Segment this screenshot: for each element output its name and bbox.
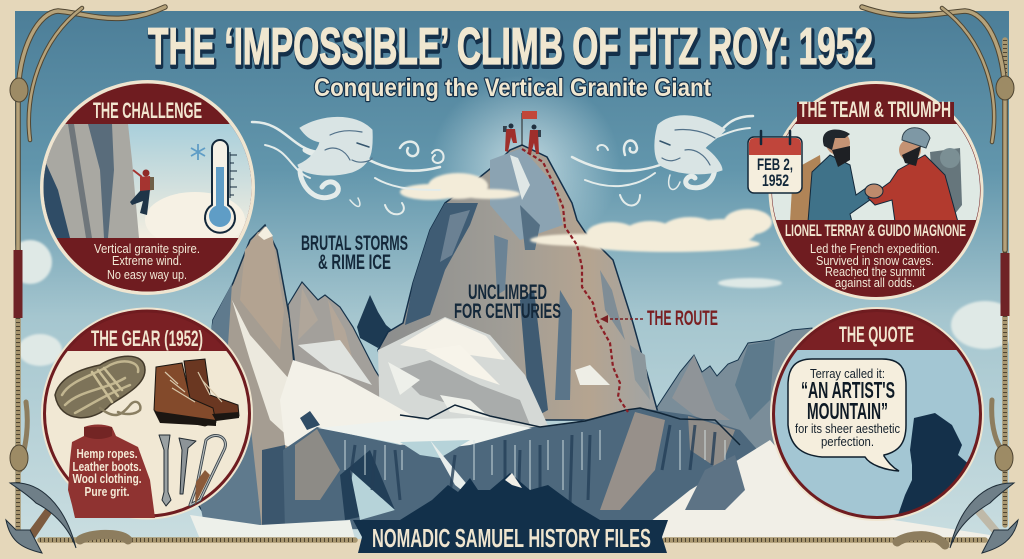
text: team details	[810, 242, 940, 290]
icon: red wool sweater with text: Hemp ropes.	[76, 447, 138, 461]
speech bubble with quote	[788, 359, 906, 471]
panel: the gear	[41, 308, 253, 520]
cloud over main peak right	[530, 209, 772, 252]
icon: snowflake	[191, 144, 205, 160]
wind spirit left	[252, 117, 444, 214]
icon: pitons and carabiner	[159, 435, 225, 506]
clouds left and right of the lower sky	[8, 240, 1019, 366]
dark rear peak	[357, 295, 392, 348]
icon: ice axe bottom left	[6, 483, 76, 553]
heading: the challenge: THE CHALLENGE	[93, 98, 202, 123]
icon: red wool sweater with text	[68, 424, 155, 518]
label: unclimbed for centuries: FOR CENTURIES	[454, 300, 561, 323]
text: challenge details: Vertical granite spire.	[94, 242, 200, 256]
text: team details: Survived in snow caves.	[816, 254, 934, 268]
label: unclimbed for centuries	[454, 281, 561, 323]
text: team details: against all odds.	[835, 276, 915, 290]
jagged middle spires	[288, 281, 392, 397]
label: unclimbed for centuries: UNCLIMBED	[468, 281, 547, 304]
subtitle: Conquering the Vertical Granite Giant	[314, 74, 712, 102]
speech bubble with quote: for its sheer aesthetic	[795, 422, 900, 436]
panel: the quote	[770, 300, 985, 525]
icon: leather boots	[154, 359, 239, 426]
heading: the gear: THE GEAR (1952)	[91, 326, 203, 351]
back range right	[657, 328, 812, 448]
rock streaks and icicles	[344, 430, 726, 490]
wind spirit right	[572, 116, 753, 206]
heading: the quote: THE QUOTE	[839, 322, 914, 347]
banner: nomadic samuel history files	[353, 473, 668, 553]
text: challenge details	[94, 242, 200, 282]
left granite spire	[198, 224, 294, 525]
speech bubble with quote: Terray called it:	[810, 367, 885, 381]
hair and face mass	[298, 117, 372, 175]
main Fitz Roy peak	[378, 145, 660, 420]
banner: nomadic samuel history files: NOMADIC SAMUEL HISTORY FILES	[372, 523, 651, 553]
icon: red wool sweater with text: Wool clothing.	[72, 472, 142, 486]
icon: coiled rope	[55, 356, 145, 418]
snow mound below main peak	[378, 317, 550, 430]
text: challenge details: Extreme wind.	[112, 254, 182, 268]
text: team details: Reached the summit	[825, 265, 925, 279]
rope knots	[10, 76, 1014, 471]
text: challenge details: No easy way up.	[107, 268, 187, 282]
label: the route with arrow: THE ROUTE	[647, 307, 718, 330]
panel: the team and triumph	[748, 81, 984, 300]
label: brutal storms: BRUTAL STORMS	[301, 232, 408, 255]
speech bubble with quote: “AN ARTIST'S	[801, 377, 895, 403]
icon: handshake	[865, 184, 883, 198]
figure: Guido Magnone in red jacket	[868, 128, 962, 222]
icon: red wool sweater with text: Leather boots.	[72, 460, 142, 474]
lower right rock	[685, 455, 745, 510]
text: team details: Led the French expedition.	[810, 242, 940, 256]
lower right snow	[640, 440, 990, 540]
snowfield	[280, 360, 419, 446]
icon: calendar feb 2 1952	[748, 131, 802, 193]
foreground ridge of rock and snow	[283, 405, 775, 530]
speech bubble with quote: perfection.	[821, 435, 874, 449]
speech bubble with quote: MOUNTAIN”	[807, 398, 888, 424]
icon: ice axe bottom right	[950, 483, 1018, 553]
climbers at summit with flag	[503, 111, 541, 154]
panel: the challenge	[40, 80, 256, 298]
cloud over main peak left	[400, 173, 520, 200]
icon: granite cliff	[40, 124, 139, 238]
icon: thermometer	[205, 140, 237, 233]
label: brutal storms: & RIME ICE	[318, 251, 391, 274]
icon: red wool sweater with text: Pure grit.	[84, 485, 130, 499]
icon: climber	[130, 170, 154, 215]
icon: silhouette of Terray	[898, 413, 967, 514]
label: the route with arrow	[600, 307, 718, 330]
dashed red route	[522, 149, 628, 412]
icon: calendar feb 2 1952: 1952	[762, 171, 789, 190]
figure: Lionel Terray in blue jacket	[790, 130, 874, 222]
icon: calendar feb 2 1952: FEB 2,	[757, 155, 793, 174]
label: brutal storms	[301, 232, 408, 274]
lower left snow	[190, 515, 355, 539]
heading: the team and triumph	[797, 97, 954, 124]
ridge line	[400, 405, 740, 445]
